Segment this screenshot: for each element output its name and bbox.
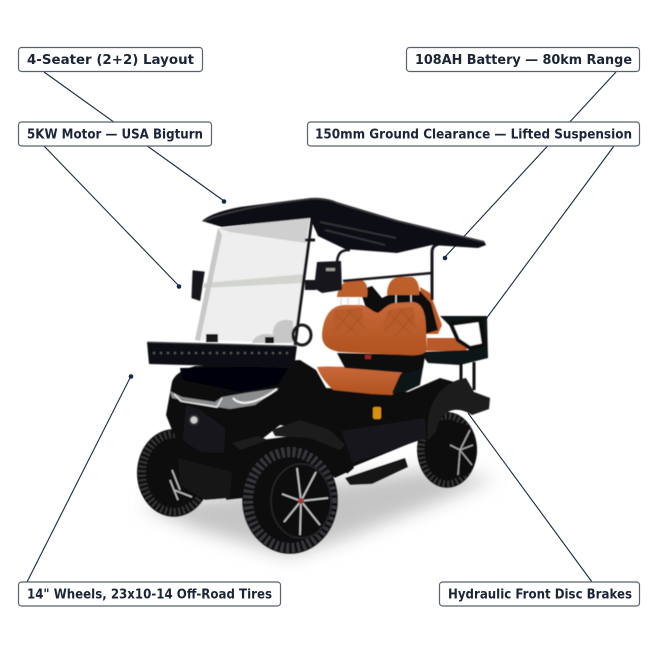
label: battery: 108AH Battery — 80km Range <box>415 53 632 68</box>
label: motor: 5KW Motor — USA Bigturn <box>27 128 203 142</box>
label: 4-seater layout: 4-Seater (2+2) Layout <box>27 53 194 68</box>
front seat bottom <box>317 367 412 395</box>
label: ground clearance: 150mm Ground Clearance — Lifted Suspension <box>315 128 632 142</box>
label: brakes: Hydraulic Front Disc Brakes <box>448 588 632 602</box>
front basket <box>147 334 297 368</box>
seat frame <box>337 353 425 373</box>
callout leader lines <box>27 72 616 582</box>
floor and sill <box>335 418 426 468</box>
windshield <box>195 217 310 343</box>
rear fender <box>427 378 490 440</box>
label: battery <box>406 48 640 72</box>
seat headrests and backing <box>337 277 428 325</box>
undercarriage <box>225 430 352 500</box>
label: motor <box>18 122 212 146</box>
rear seat and rack <box>419 287 488 390</box>
ground shadow <box>140 470 495 556</box>
right rear wheel <box>417 412 477 488</box>
headlight <box>170 388 279 409</box>
windshield frame and latch <box>193 218 315 345</box>
golf cart illustration <box>137 198 495 556</box>
label: ground clearance <box>308 122 640 146</box>
front bumper <box>178 458 232 500</box>
reflector light <box>373 407 381 419</box>
label: brakes <box>440 582 640 606</box>
roof support bars <box>337 243 444 300</box>
label: wheels: 14" Wheels, 23x10-14 Off-Road Tires <box>27 588 272 602</box>
seat armrest <box>392 353 425 393</box>
front body <box>166 360 354 475</box>
seat back <box>322 302 427 355</box>
step board <box>345 458 408 485</box>
label: wheels <box>18 582 280 606</box>
steering wheel <box>293 325 311 345</box>
side mirror <box>305 261 342 293</box>
roof <box>202 198 486 253</box>
left rear tire <box>137 429 211 517</box>
cabinet under seat <box>326 378 465 468</box>
label: 4-seater layout <box>18 48 202 72</box>
seat logo accent <box>365 355 371 359</box>
front main wheel <box>242 446 338 554</box>
